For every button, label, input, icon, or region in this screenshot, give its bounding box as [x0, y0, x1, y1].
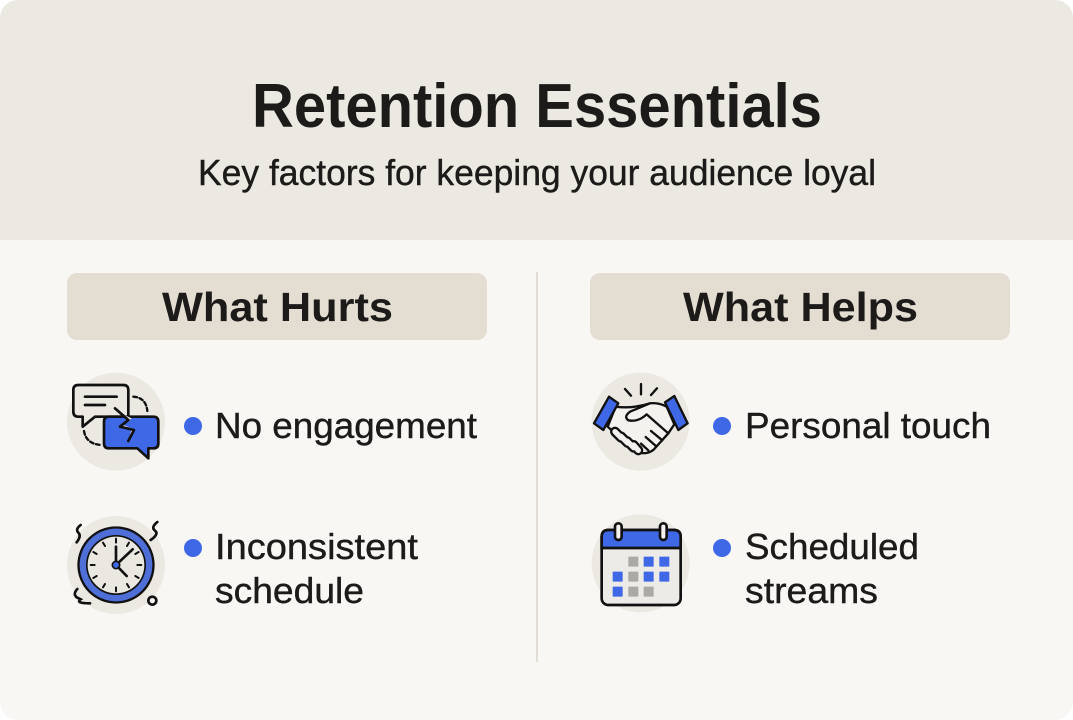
icon: handshake	[592, 373, 690, 471]
title: Retention Essentials	[252, 72, 822, 141]
bullet and label: scheduled streams: Scheduled	[745, 526, 919, 567]
heading: what hurts	[67, 273, 487, 340]
bullet and label: no engagement: No engagement	[215, 405, 477, 446]
bullet and label: inconsistent schedule: Inconsistent	[215, 526, 418, 567]
heading: what helps: What Helps	[683, 284, 918, 330]
bullet and label: inconsistent schedule	[184, 532, 418, 604]
icon: calendar	[592, 514, 690, 612]
bullet and label: inconsistent schedule: schedule	[215, 570, 364, 611]
heading: what hurts: What Hurts	[162, 284, 393, 330]
bullet and label: scheduled streams	[713, 532, 917, 604]
bullet and label: personal touch: Personal touch	[745, 405, 991, 446]
heading: what helps	[590, 273, 1010, 340]
panel: what helps	[590, 273, 1010, 612]
header band	[0, 0, 1073, 240]
bullet and label: personal touch	[713, 412, 989, 438]
icon: broken chat bubbles	[67, 373, 165, 471]
icon: clock	[67, 516, 165, 614]
bullet and label: scheduled streams: streams	[745, 570, 878, 611]
panel: what hurts	[67, 273, 487, 614]
subtitle: Key factors for keeping your audience loyal	[198, 152, 876, 193]
